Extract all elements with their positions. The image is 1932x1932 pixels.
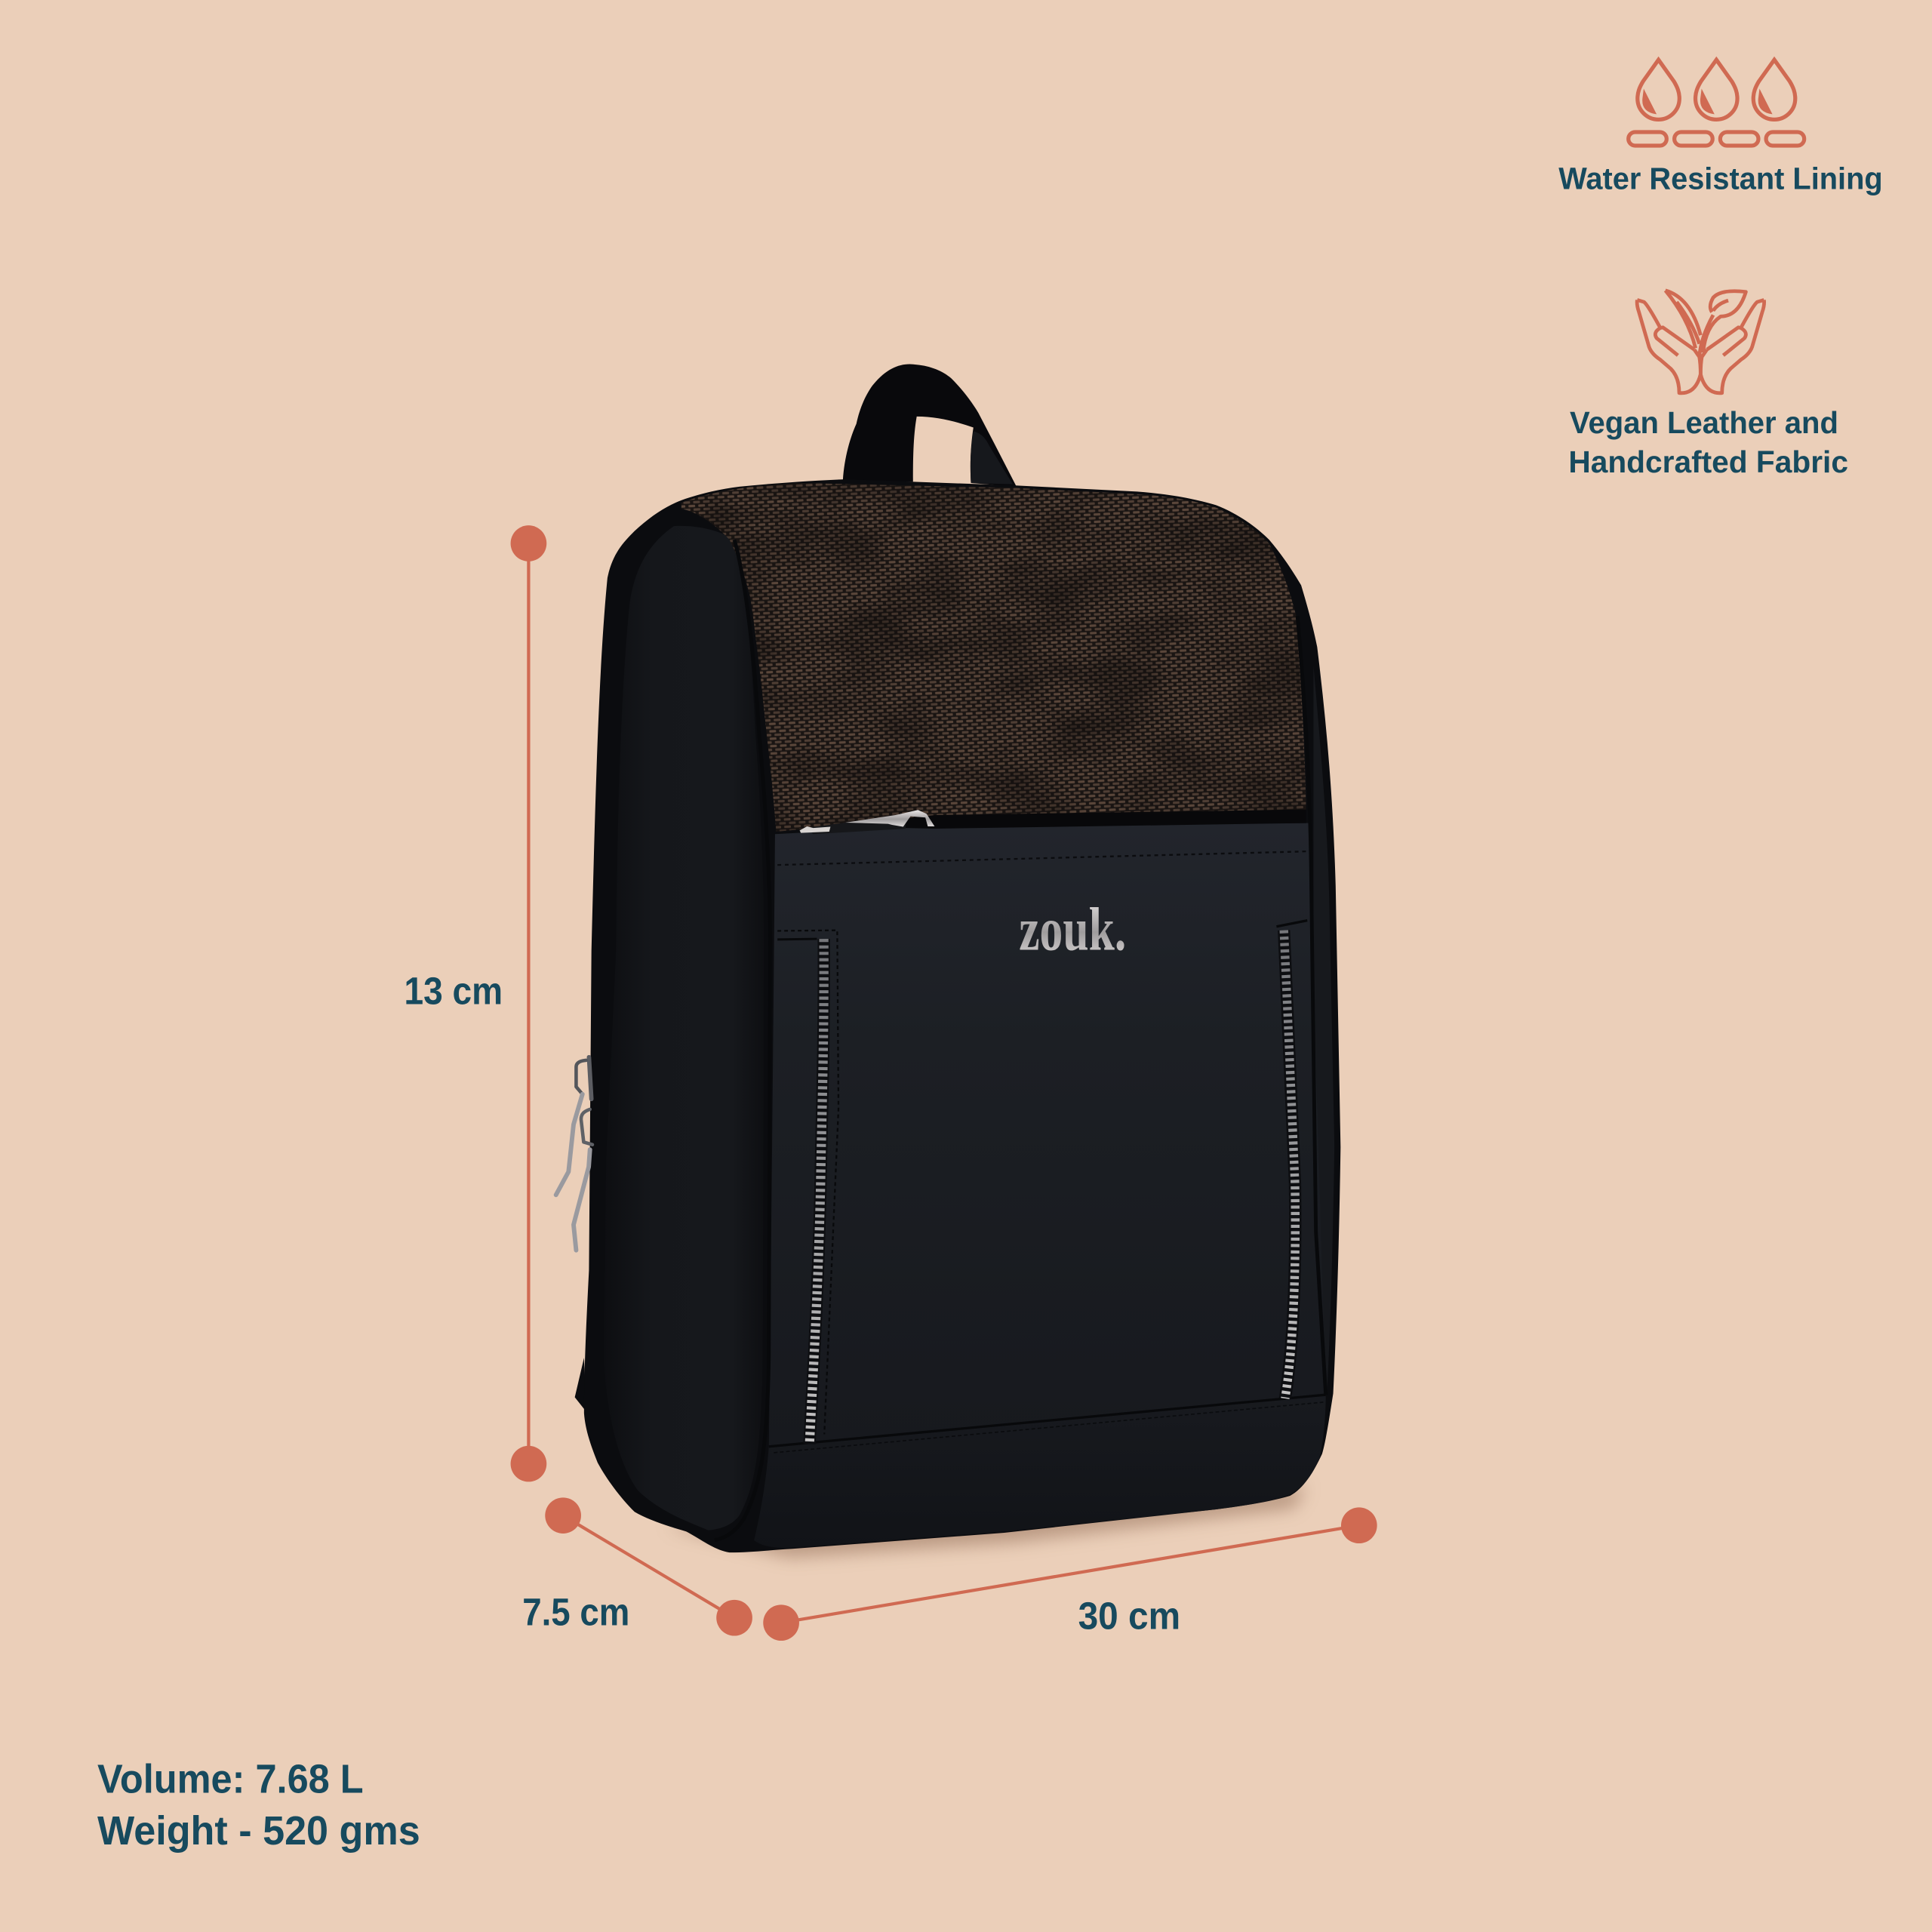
front pocket: [769, 823, 1326, 1447]
logo: zouk.: [1019, 894, 1126, 963]
dimension: depth 7.5 cm: [522, 1497, 752, 1636]
right edge strip: [1313, 666, 1334, 1395]
band seam: [769, 1395, 1326, 1447]
caption: vegan leather and handcrafted fabric: Vegan Leather and: [1570, 405, 1838, 440]
bag ground shadow: [666, 1486, 1306, 1558]
handle strap base: [971, 431, 1013, 485]
product photo: backpack: [556, 364, 1340, 1558]
top handle: [843, 364, 1017, 487]
caption: vegan leather and handcrafted fabric: [1568, 405, 1848, 479]
top zipper tape: [906, 810, 1306, 829]
bag body silhouette: [584, 479, 1340, 1552]
volume and weight text: Weight - 520 gms: [97, 1808, 420, 1854]
side panel: [604, 526, 764, 1531]
bottom band: [754, 1395, 1326, 1548]
caption: vegan leather and handcrafted fabric: Handcrafted Fabric: [1568, 445, 1848, 479]
seam between side and front: [715, 540, 770, 1540]
right zipper: [1284, 931, 1295, 1398]
volume and weight text: Volume: 7.68 L: [97, 1757, 364, 1802]
dimension: width 30 cm: 30 cm: [1078, 1594, 1180, 1637]
icon: hands holding plant: [1637, 291, 1764, 393]
pocket stitching: [777, 851, 1306, 865]
right edge piping: [1297, 616, 1326, 1395]
left pocket lip: [777, 938, 817, 940]
dimension: width 30 cm: [763, 1507, 1377, 1641]
right pocket lip: [1276, 921, 1307, 927]
caption: water resistant lining: Water Resistant Lining: [1558, 162, 1883, 196]
left zipper: [810, 939, 824, 1444]
zipper pull: [800, 810, 934, 834]
side zipper pulls: [556, 1057, 592, 1251]
back strap sliver: [575, 1358, 586, 1412]
dimension: height 13 cm: [405, 525, 546, 1481]
volume and weight text: [97, 1757, 420, 1854]
icon: water drops over fabric: [1629, 60, 1804, 146]
dimension: depth 7.5 cm: 7.5 cm: [522, 1590, 629, 1633]
dimension: height 13 cm: 13 cm: [405, 970, 503, 1013]
left pocket stitching: [777, 931, 838, 1434]
fabric flap: [681, 483, 1306, 832]
